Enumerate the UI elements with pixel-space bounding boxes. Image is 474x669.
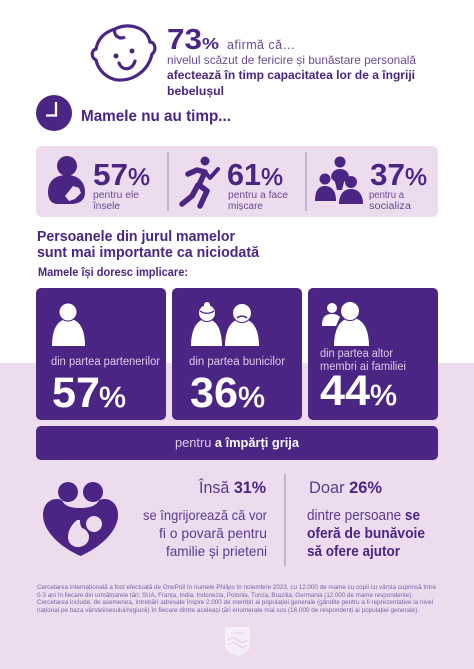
text block: only 26%: Doar 26% xyxy=(309,478,382,497)
text block: only 26%: oferă de bunăvoie xyxy=(307,526,425,542)
logo: Philips shield: PHILIPS xyxy=(231,631,245,635)
text block: statement: nivelul scăzut de fericire și bunăstare personală xyxy=(167,53,416,67)
stat: 61% for exercise: mișcare xyxy=(228,201,263,212)
panel: grandparents: 36 xyxy=(190,369,238,417)
text block: only 26%: dintre persoane se xyxy=(307,508,420,524)
icon: mother with baby xyxy=(48,156,85,204)
logo: Philips shield xyxy=(225,627,250,656)
text block: however 31%: familie și prieteni xyxy=(166,543,267,559)
footnote: național pe baza vârstei/sexului/regiunii) în fiecare dintre aceleași țări enumerate mai sus (16.000 de respondenți ai populației generale). xyxy=(37,608,419,614)
heading: people around mothers: sunt mai importante ca niciodată xyxy=(37,245,260,261)
stat: 61% for exercise: % xyxy=(261,164,283,191)
panel: grandparents: % xyxy=(238,382,265,414)
panel: other family: membri ai familiei xyxy=(320,361,406,373)
panel: partners xyxy=(36,288,166,420)
text block: statement: afectează în timp capacitatea lor de a îngriji xyxy=(167,68,415,82)
footnote: Cercetarea include, de asemenea, întrebări adresate înspre 2.000 de membri ai populației generale (gândite pentru a fi reprezentative la nivel xyxy=(37,600,433,606)
heading: people around mothers: Persoanele din jurul mamelor xyxy=(37,229,235,245)
stat: 61% for exercise: 61 xyxy=(227,157,261,192)
text block: however 31%: se îngrijorează că vor xyxy=(143,507,267,523)
stat: 57% for themselves: 57 xyxy=(93,157,128,192)
stat: 57% for themselves: pentru ele xyxy=(93,190,139,201)
icon: heart with parents and baby xyxy=(43,482,118,556)
stat: 37% to socialize xyxy=(369,157,427,212)
text block: however 31%: Însă 31% xyxy=(198,478,266,497)
panel: other family xyxy=(308,288,438,420)
icon: three people xyxy=(315,156,363,204)
heading: people around mothers xyxy=(37,229,260,261)
text block: statement: bebelușul xyxy=(167,84,224,98)
panel: other family: 44 xyxy=(320,367,370,415)
heading: Mamele nu au timp: Mamele nu au timp... xyxy=(81,108,231,125)
text block: however 31%: fi o povară pentru xyxy=(159,525,267,541)
text block: however 31% xyxy=(143,478,267,559)
headline stat: 73%: 73 xyxy=(167,24,202,56)
icon: clock xyxy=(36,95,72,131)
stat: 37% to socialize: % xyxy=(405,164,427,191)
stat: 57% for themselves: % xyxy=(128,164,150,191)
text block: statement xyxy=(167,53,416,98)
panel: partners: % xyxy=(99,382,126,414)
stat: 37% to socialize: socializa xyxy=(369,201,411,212)
stat: 61% for exercise: pentru a face xyxy=(228,190,288,201)
stat: 61% for exercise xyxy=(227,157,288,212)
footnote: Cercetarea internațională a fost efectuată de OnePoll în numele Philips în noiembrie 2023, cu 12.000 de mame cu copii cu vârsta cuprinsă între xyxy=(37,585,437,591)
stat: 57% for themselves: însele xyxy=(92,201,120,212)
headline stat: 73%: afirmă că… xyxy=(227,38,295,52)
panel: partners: din partea partenerilor xyxy=(51,356,160,368)
footnote: 0-3 ani în fiecare din următoarele țări: SUA, Franța, India, Indonezia, Polonia, Turcia, Brazilia, Germania (12.000 de mame respondente). xyxy=(37,593,413,599)
headline stat: 73%: % xyxy=(202,36,219,53)
panel: grandparents xyxy=(172,288,302,420)
icon: partner silhouette xyxy=(52,303,85,346)
stat: 37% to socialize: 37 xyxy=(370,157,405,192)
banner: to share care: pentru a împărți grija xyxy=(175,436,300,450)
icon: family silhouettes xyxy=(322,302,369,346)
icon: grandparents silhouettes xyxy=(191,302,259,346)
footnote xyxy=(37,585,437,614)
text block: only 26%: să ofere ajutor xyxy=(307,544,400,560)
panel: other family: % xyxy=(370,380,397,412)
subheading: mothers want involvement: Mamele își doresc implicare: xyxy=(38,267,188,279)
stat: 37% to socialize: pentru a xyxy=(369,190,404,201)
panel: grandparents: din partea bunicilor xyxy=(189,356,285,368)
headline stat: 73% xyxy=(167,24,295,56)
banner: to share care xyxy=(36,426,438,460)
icon: baby face xyxy=(92,26,155,80)
icon: runner xyxy=(182,156,218,206)
panel: partners: 57 xyxy=(52,369,100,417)
text block: only 26% xyxy=(307,478,425,560)
panel: time for themselves xyxy=(36,146,438,217)
panel: other family: din partea altor xyxy=(320,348,393,360)
stat: 57% for themselves xyxy=(92,157,150,212)
